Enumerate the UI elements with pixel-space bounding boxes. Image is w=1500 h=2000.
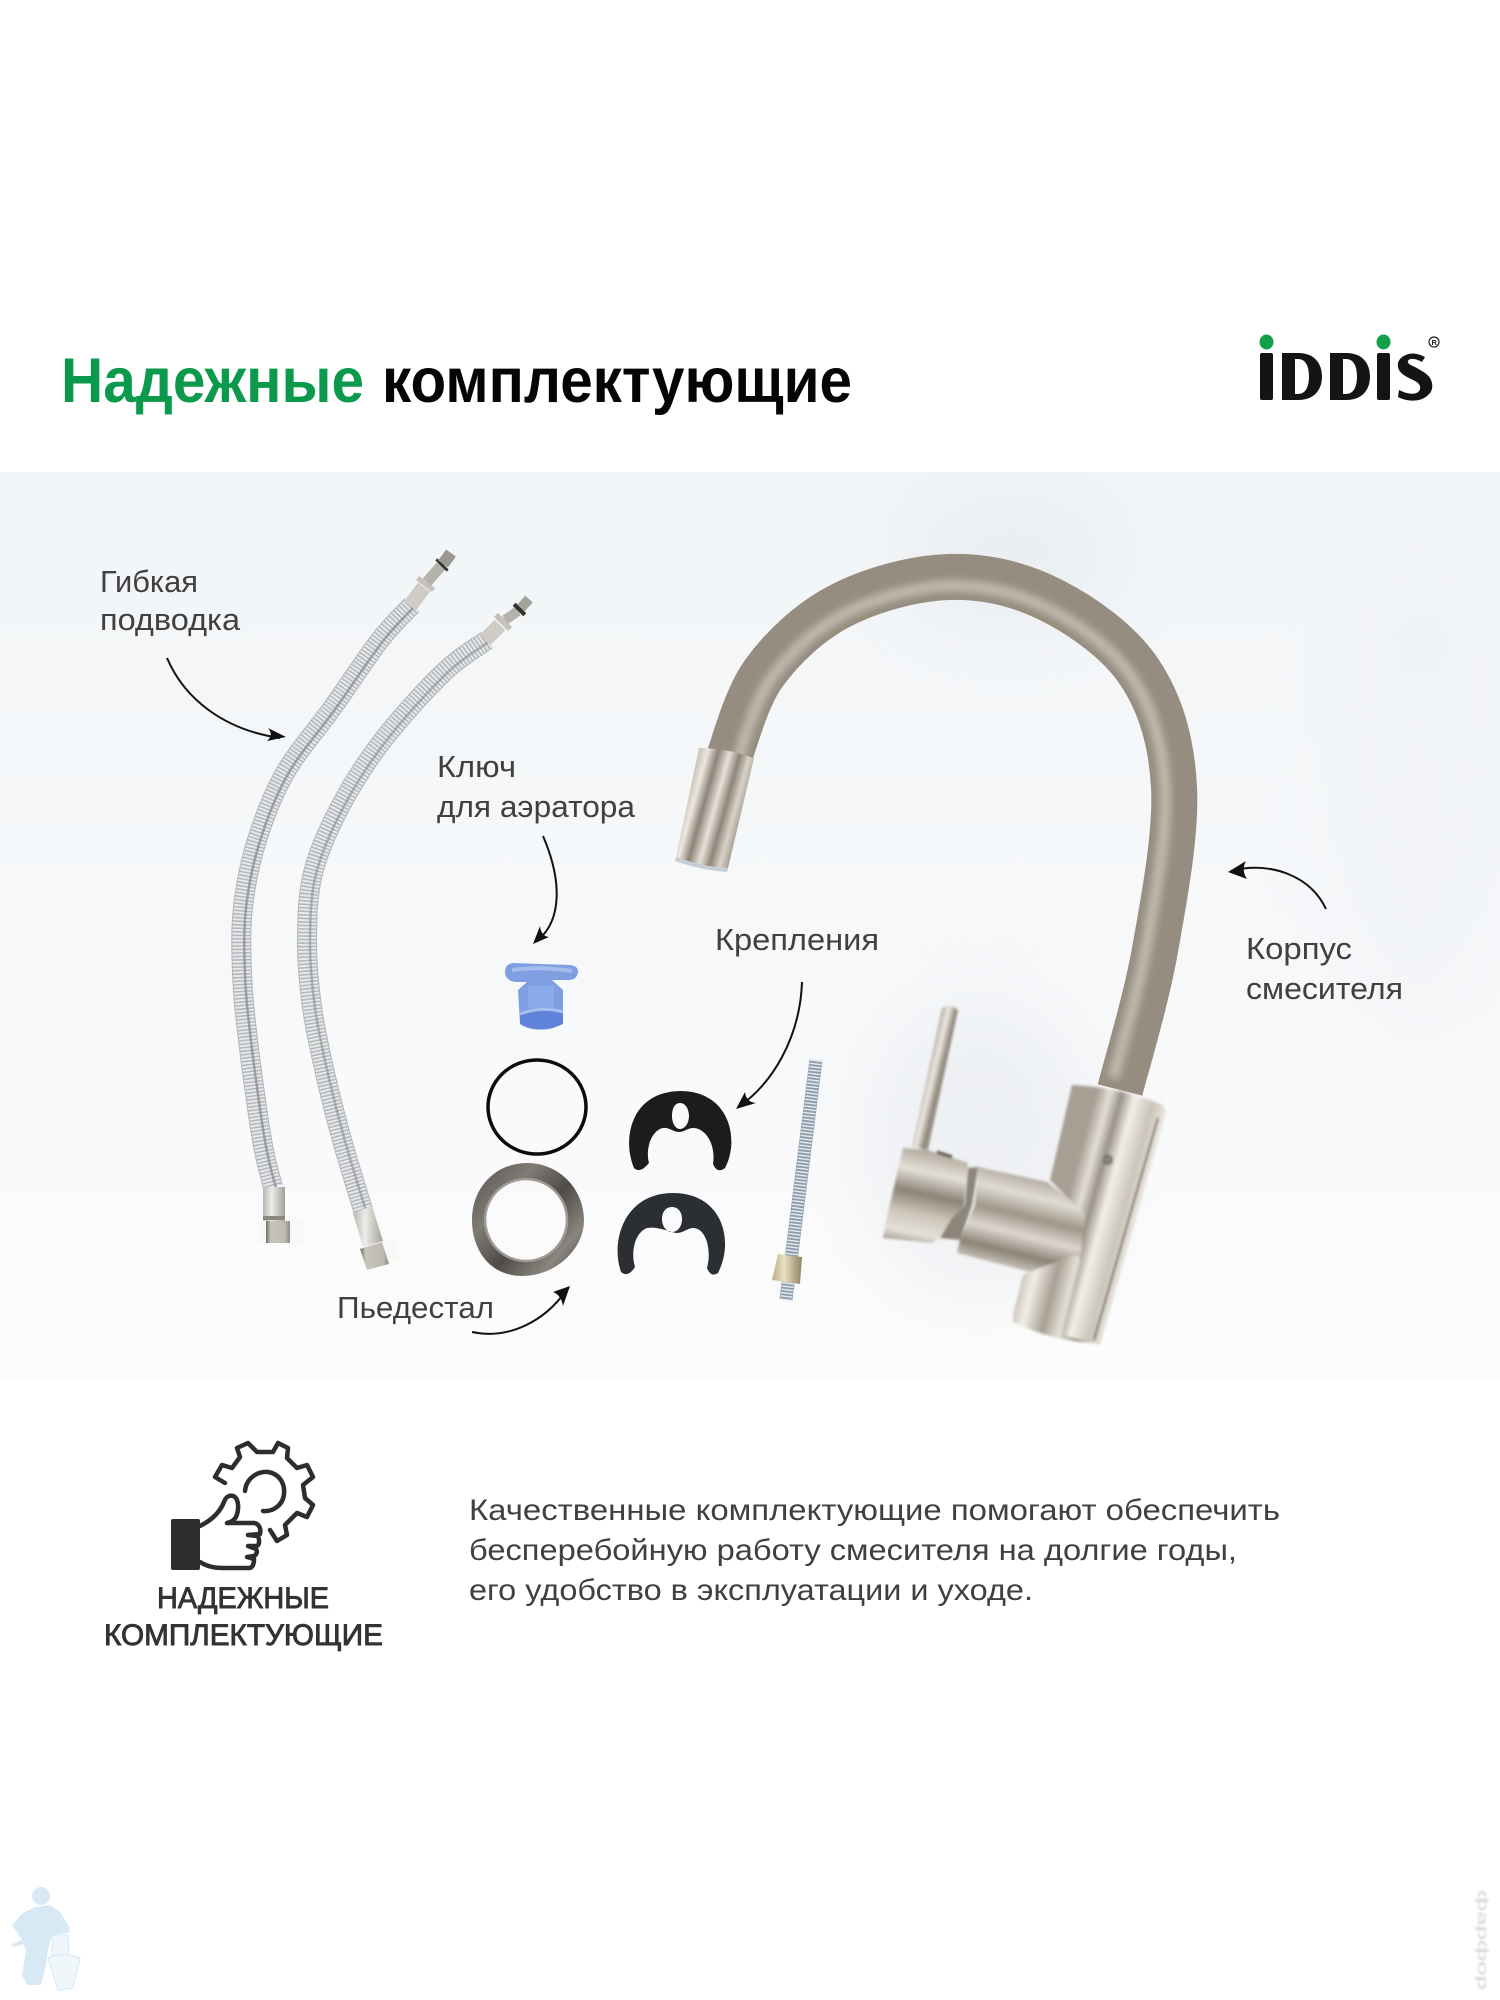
callout: aerator key label: Ключ: [437, 749, 516, 784]
panel: product photo: [0, 472, 1500, 1380]
spout sleeve: [675, 748, 754, 872]
hose fittings: top: [410, 553, 529, 640]
arrow: to body: [1228, 861, 1326, 909]
ring joint: [940, 1167, 978, 1240]
gear centre arc: [245, 1472, 284, 1511]
handle cylinder: [883, 1148, 968, 1243]
callout: aerator key label: [437, 749, 636, 824]
title: [61, 346, 852, 416]
mounting clip bottom: [618, 1193, 725, 1275]
faucet: [675, 577, 1174, 1345]
main cylinder: [937, 1085, 1166, 1345]
lower stub: [1013, 1255, 1102, 1343]
callout: hose label: Гибкая: [100, 564, 198, 599]
callout: fasteners label: Крепления: [715, 922, 879, 957]
aerator key: [505, 963, 578, 1030]
logo: IDDIS: R: [1432, 338, 1438, 347]
watermark: vertical site name: фарфор: [1474, 1890, 1491, 1990]
arrow: to pedestal: [472, 1286, 570, 1334]
description text: бесперебойную работу смесителя на долгие годы,: [469, 1534, 1237, 1567]
cuff: [171, 1519, 200, 1570]
description text: Качественные комплектующие помогают обеспечить: [469, 1494, 1280, 1527]
gear outline: [215, 1443, 313, 1541]
icon: thumbs up with gear: [171, 1443, 313, 1570]
title: Надежные: [61, 346, 364, 416]
threaded rod: [772, 1060, 816, 1300]
lever: [912, 1006, 958, 1150]
callout: body label: [1246, 931, 1403, 1006]
watermark: plumber figure: [11, 1887, 80, 1990]
photo background: [0, 472, 1500, 1380]
spout tube: [728, 577, 1174, 1090]
pedestal ring: [472, 1163, 584, 1276]
hoses: flexible connectors: [241, 553, 529, 1270]
icon caption: НАДЕЖНЫЕ: [157, 1582, 329, 1615]
callout: aerator key label: для аэратора: [437, 789, 636, 824]
arrow: to fasteners: [736, 982, 802, 1109]
arrow: to key: [533, 836, 557, 944]
faucet body: [883, 1006, 1166, 1345]
o-ring: [488, 1060, 586, 1154]
description text: [469, 1494, 1280, 1607]
callout: hose label: подводка: [100, 602, 241, 637]
title: комплектующие: [382, 346, 852, 416]
callout: pedestal label: Пьедестал: [337, 1290, 494, 1325]
hose fittings: bottom: [258, 1187, 401, 1270]
description text: его удобство в эксплуатации и уходе.: [469, 1574, 1033, 1607]
callout: body label: Корпус: [1246, 931, 1352, 966]
callout: body label: смесителя: [1246, 971, 1403, 1006]
logo: IDDIS: [1260, 334, 1439, 401]
icon caption: [104, 1582, 383, 1652]
soft studio shadows: [882, 1034, 1066, 1278]
icon caption: КОМПЛЕКТУЮЩИЕ: [104, 1619, 383, 1652]
hand outline: [200, 1496, 260, 1568]
arrow: to hose: [167, 658, 286, 741]
horizontal arm: [957, 1167, 1085, 1272]
callout: hose label: [100, 564, 241, 637]
mounting clip top: [629, 1091, 731, 1170]
